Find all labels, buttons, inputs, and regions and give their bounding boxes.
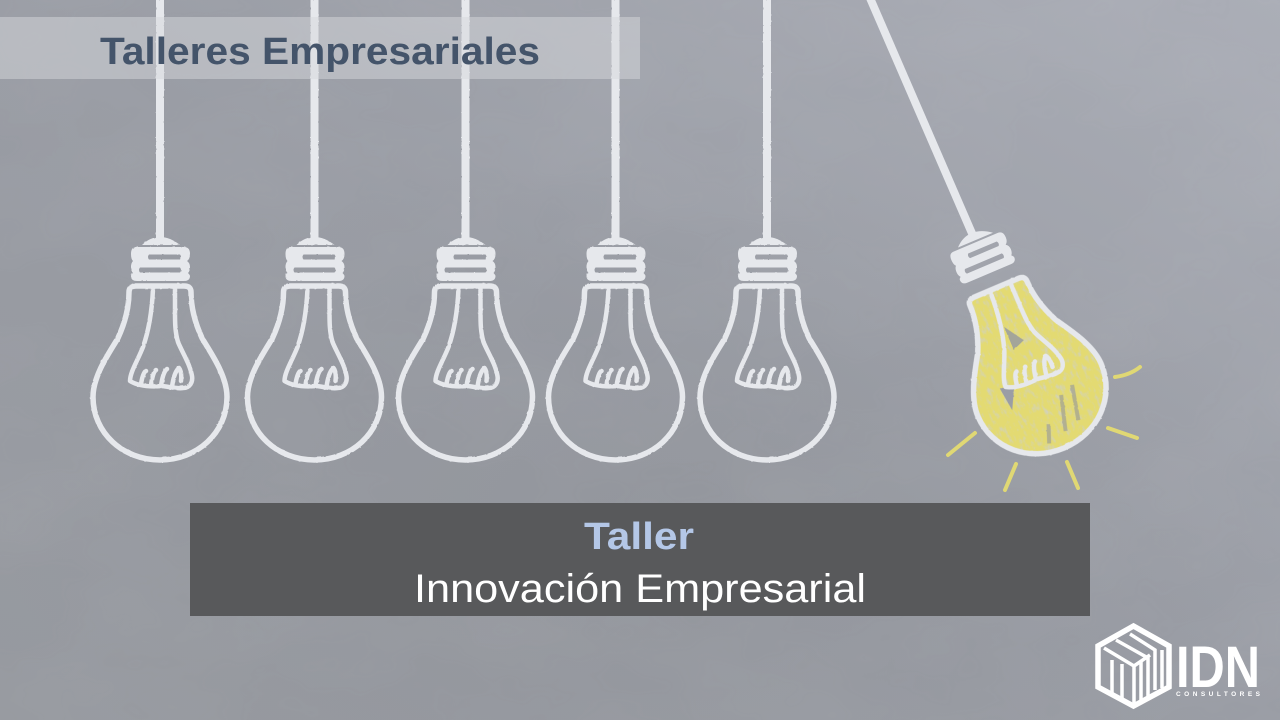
icon: unlit bulb 4 — [548, 0, 682, 460]
title banner: Talleres Empresariales — [100, 31, 540, 73]
logo: IDN Consultores — [1098, 626, 1261, 706]
icon: light rays — [948, 367, 1140, 490]
subtitle panel — [190, 503, 1090, 616]
text: workshop name: Innovación Empresarial — [414, 567, 866, 611]
icon: hexagon cube — [1098, 626, 1169, 706]
text: IDN wordmark: IDN — [1176, 635, 1260, 700]
icon: unlit bulb 1 — [93, 0, 227, 460]
title banner — [0, 17, 640, 79]
icon: unlit bulb 5 — [700, 0, 834, 460]
icon: unlit bulb 3 — [398, 0, 532, 460]
heading: Taller: Taller — [584, 516, 694, 558]
icon: unlit bulb 2 — [248, 0, 382, 460]
text: Consultores: CONSULTORES — [1176, 691, 1261, 698]
icon: lit swinging bulb — [870, 0, 1140, 490]
